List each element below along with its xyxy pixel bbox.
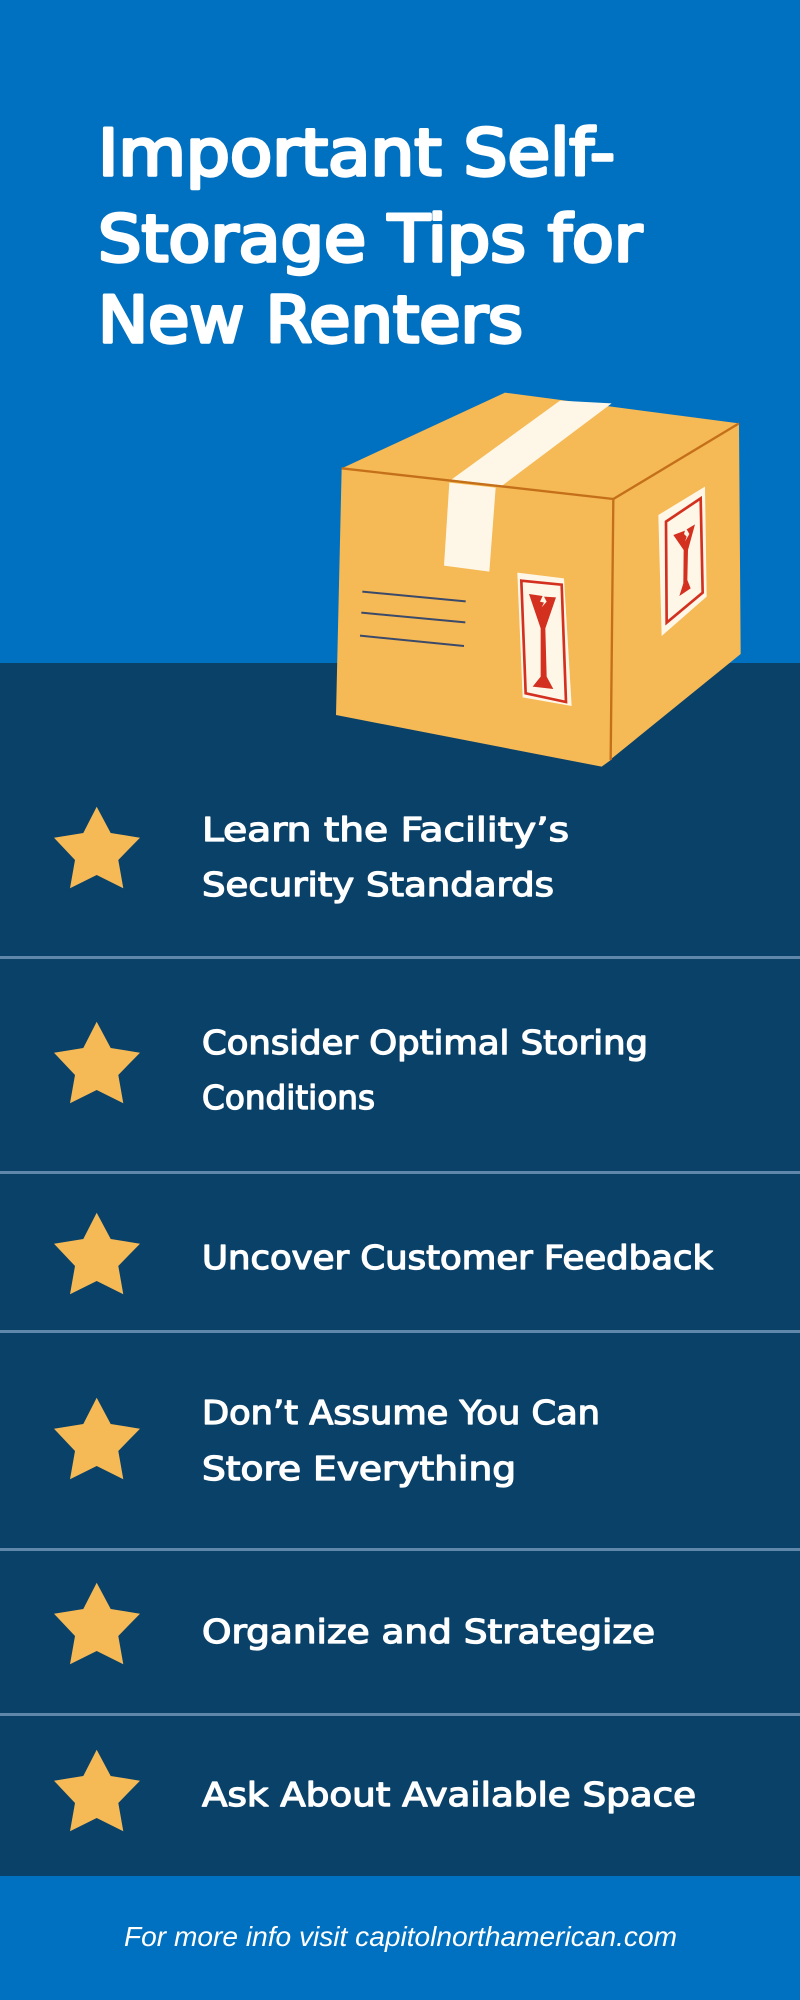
icon: star bbox=[54, 1583, 140, 1664]
tip text: Don’t Assume You Can bbox=[202, 1393, 600, 1432]
title: Storage Tips for bbox=[98, 203, 643, 277]
panel: blue header background bbox=[0, 0, 800, 663]
icon: star bbox=[54, 807, 140, 888]
panel: navy tips background bbox=[0, 663, 800, 1876]
icon: star bbox=[54, 1750, 140, 1831]
tip 5: organize bbox=[54, 1583, 655, 1664]
tip text: Store Everything bbox=[202, 1449, 516, 1488]
tip text: Organize and Strategize bbox=[202, 1612, 655, 1651]
tip text: Learn the Facility’s bbox=[202, 810, 569, 849]
title: Important Self- bbox=[98, 117, 615, 191]
footer text: For more info visit capitolnorthamerican.com bbox=[124, 1921, 677, 1952]
title bbox=[98, 117, 643, 358]
tip text: Security Standards bbox=[202, 865, 554, 904]
icon: cardboard box bbox=[336, 393, 741, 767]
title: New Renters bbox=[98, 284, 523, 358]
tip text bbox=[202, 810, 569, 904]
icon: star bbox=[54, 1213, 140, 1294]
icon: star bbox=[54, 1398, 140, 1479]
tip text bbox=[202, 1393, 600, 1488]
tip 6: available space bbox=[54, 1750, 696, 1831]
icon: star bbox=[54, 1022, 140, 1103]
tip 4: don't assume bbox=[54, 1393, 600, 1488]
tip text: Conditions bbox=[202, 1078, 375, 1117]
panel: blue footer background bbox=[0, 1876, 800, 2000]
tip text: Uncover Customer Feedback bbox=[202, 1238, 714, 1277]
tip 3: customer feedback bbox=[54, 1213, 714, 1294]
tip text bbox=[202, 1023, 648, 1117]
divider lines bbox=[0, 956, 800, 1716]
tip 1: security standards bbox=[54, 807, 569, 904]
tip 2: storing conditions bbox=[54, 1022, 648, 1117]
tip text: Ask About Available Space bbox=[202, 1775, 696, 1814]
tip text: Consider Optimal Storing bbox=[202, 1023, 648, 1062]
